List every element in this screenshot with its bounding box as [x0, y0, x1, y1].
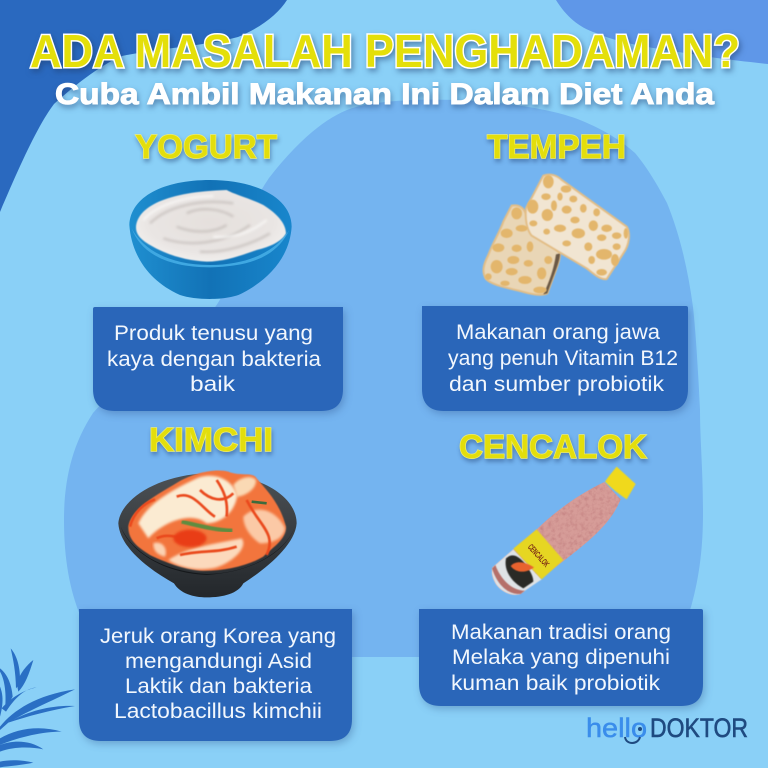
cencalok heading: CENCALOK [459, 428, 647, 465]
kimchi description: Jeruk orang Korea yang [100, 625, 336, 648]
periwinkle corner blob [556, 0, 768, 64]
kimchi description: Lactobacillus kimchii [114, 700, 322, 723]
tempeh card [422, 306, 688, 411]
logo: hello doktor: DOKTOR [650, 713, 748, 743]
icon: tempeh [484, 175, 629, 295]
yogurt description [107, 322, 321, 396]
central blue blob [64, 100, 703, 657]
icon: cencalok bottle [492, 467, 636, 595]
subtitle: Cuba Ambil Makanan Ini Dalam Diet Anda [55, 78, 714, 111]
kimchi description [100, 625, 336, 723]
kimchi description: mengandungi Asid [125, 650, 312, 673]
yogurt heading: YOGURT [135, 128, 277, 165]
yogurt description: Produk tenusu yang [114, 322, 313, 345]
yogurt description: kaya dengan bakteria [107, 348, 321, 371]
cencalok description: Makanan tradisi orang [451, 621, 671, 644]
yogurt card [93, 307, 343, 411]
section: kimchi [79, 421, 352, 741]
tempeh description: yang penuh Vitamin B12 [448, 347, 678, 370]
icon: cencalok bottle: CENCALOK [526, 542, 552, 569]
icon: palm leaf [0, 648, 75, 767]
title: ADA MASALAH PENGHADAMAN? [30, 25, 740, 77]
icon: kimchi bowl [118, 470, 297, 597]
section: cencalok [419, 428, 703, 706]
kimchi description: Laktik dan bakteria [125, 675, 312, 698]
icon: yogurt bowl [129, 180, 292, 299]
tempeh heading: TEMPEH [487, 128, 626, 165]
cencalok card [419, 609, 703, 706]
dark blue corner blob [0, 0, 287, 212]
cencalok description: Melaka yang dipenuhi [452, 646, 670, 669]
cencalok description [451, 621, 671, 695]
section: yogurt [93, 128, 343, 411]
tempeh description [448, 321, 678, 396]
kimchi heading: KIMCHI [149, 421, 273, 458]
logo: hello doktor: hello [586, 713, 647, 743]
tempeh description: dan sumber probiotik [449, 373, 665, 396]
tempeh description: Makanan orang jawa [456, 321, 660, 344]
section: tempeh [422, 128, 688, 411]
cencalok description: kuman baik probiotik [451, 672, 661, 695]
logo: hello doktor [586, 713, 748, 743]
yogurt description: baik [190, 373, 236, 396]
kimchi card [79, 609, 352, 741]
